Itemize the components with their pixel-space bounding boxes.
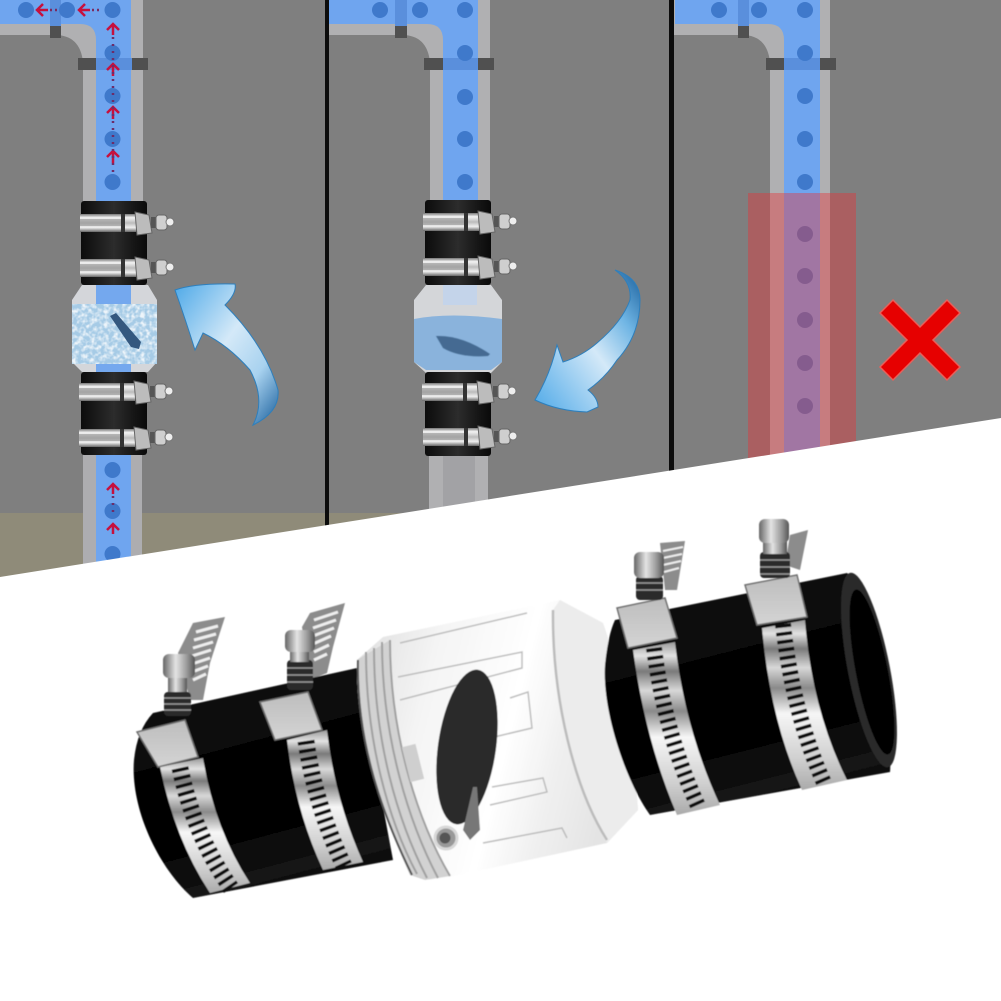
lower empty pipe — [429, 450, 488, 525]
clamp band 1 — [137, 720, 250, 893]
right rubber coupling — [605, 569, 909, 815]
internal ribs — [398, 613, 567, 843]
left rubber coupling — [134, 668, 393, 898]
floor strip — [0, 513, 670, 603]
panel: water stops, valve closed — [329, 0, 640, 525]
white product area — [0, 418, 1001, 1001]
red cross — [880, 300, 960, 380]
water arrow up — [175, 284, 278, 425]
clamp band 2 — [260, 692, 363, 870]
product: check valve with rubber couplings — [134, 519, 909, 898]
valve disc — [427, 666, 507, 828]
flange band shading — [357, 640, 450, 880]
water arrow down — [535, 270, 640, 412]
lower pipe — [83, 450, 142, 575]
pipe flange — [50, 0, 148, 70]
water column — [329, 0, 478, 205]
clear valve body — [72, 285, 157, 372]
clear valve body — [414, 285, 502, 373]
elbow pipe — [674, 0, 830, 470]
valve open — [72, 201, 174, 455]
right clamp screws — [634, 519, 790, 600]
water column — [675, 0, 820, 470]
red warning zone — [748, 193, 856, 483]
water particles — [18, 2, 120, 190]
divider — [669, 0, 674, 475]
elbow pipe — [0, 0, 143, 205]
divider — [325, 0, 329, 530]
background: grey wall — [0, 0, 1001, 600]
hinge — [435, 787, 480, 849]
water particles — [372, 2, 473, 190]
water column — [0, 0, 131, 205]
panel: water flowing up, valve open — [0, 0, 278, 575]
clear valve body — [357, 600, 638, 880]
left coupling tongues — [178, 603, 345, 700]
left clamp screws — [163, 630, 315, 716]
valve disc closed — [436, 336, 490, 356]
right coupling tongues — [660, 530, 808, 590]
seam — [553, 610, 607, 840]
valve disc tilted open — [110, 313, 141, 349]
pipe flange — [738, 0, 836, 70]
cone shading — [553, 600, 638, 843]
clamp band 4 — [745, 575, 847, 790]
valve closed — [414, 200, 517, 456]
elbow pipe — [329, 0, 490, 205]
flange rings — [366, 640, 450, 878]
water particles — [711, 2, 813, 414]
pipe flange — [395, 0, 494, 70]
panel: no valve, backflow forbidden — [674, 0, 960, 483]
flow arrows — [37, 4, 119, 534]
clamp band 3 — [617, 598, 720, 815]
